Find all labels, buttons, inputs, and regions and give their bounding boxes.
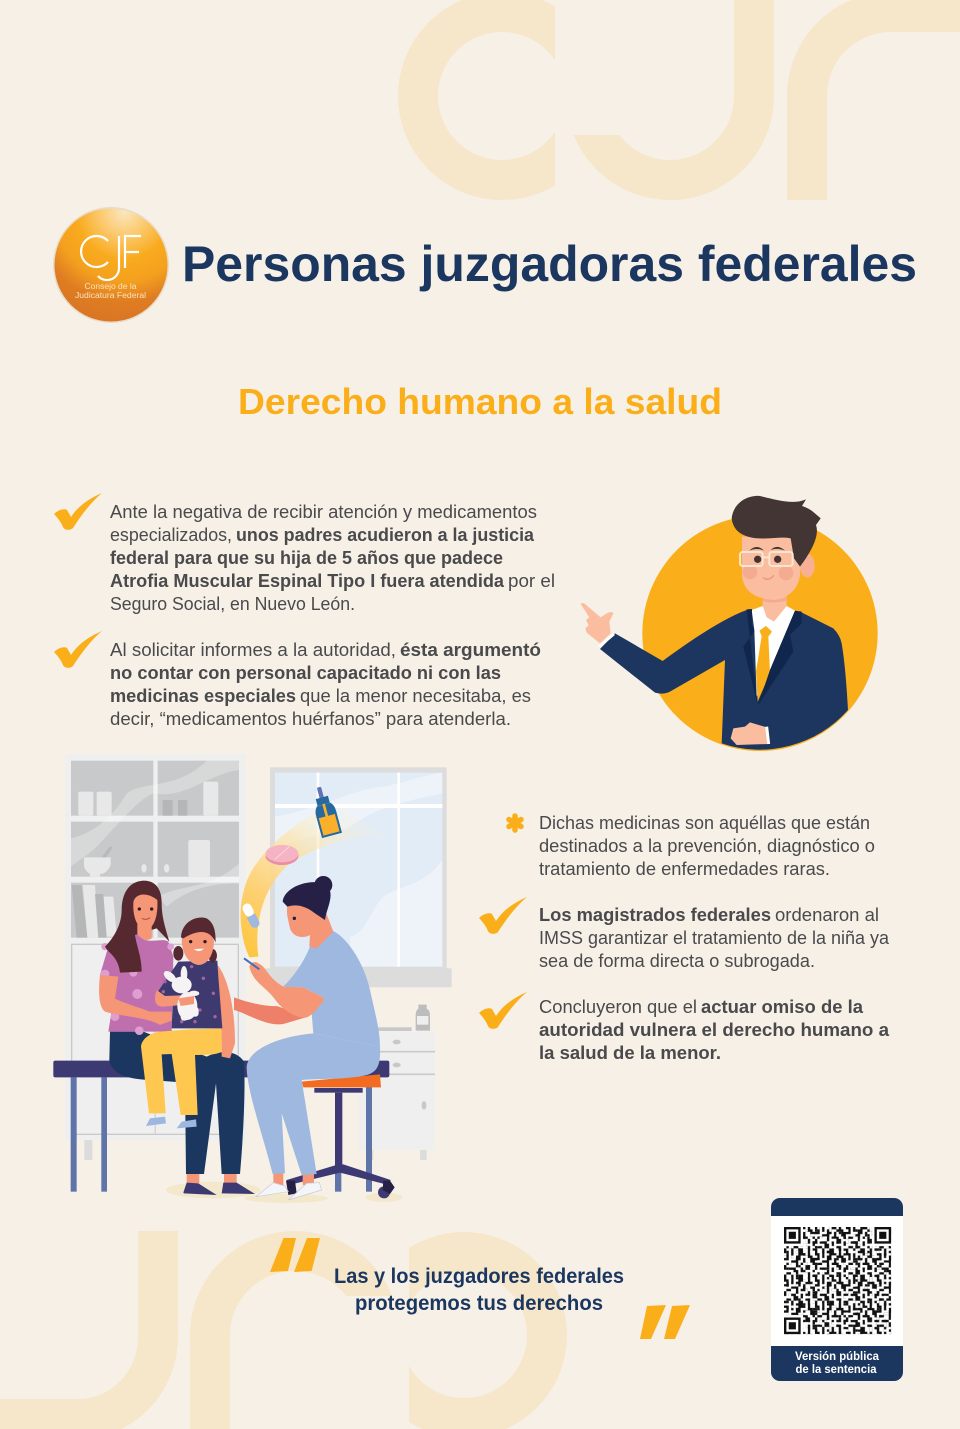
stool bbox=[286, 1074, 395, 1198]
text block: authority response: que la menor necesitaba, es bbox=[300, 685, 531, 706]
subtitle: Derecho humano a la salud bbox=[238, 381, 722, 422]
eyes and brows bbox=[749, 547, 785, 563]
text block: authority response: ésta argumentó bbox=[400, 639, 541, 660]
girl bbox=[141, 917, 235, 1128]
logo: Consejo de la Judicatura Federal: Consejo de la bbox=[84, 282, 137, 291]
QR card: de la sentencia bbox=[796, 1364, 877, 1376]
text block: definition of orphan drugs: destinados a la prevención, diagnóstico o bbox=[539, 835, 875, 856]
text block: conclusion bbox=[539, 996, 890, 1063]
watermark: top CJF letters bbox=[418, 0, 960, 200]
text block: authority response: decir, “medicamentos huérfanos” para atenderla. bbox=[110, 708, 511, 729]
text block: definition of orphan drugs bbox=[539, 812, 875, 879]
nurse bbox=[234, 876, 380, 1200]
slogan bbox=[334, 1265, 624, 1315]
tie bbox=[756, 626, 772, 702]
text block: definition of orphan drugs: Dichas medicinas son aquéllas que están bbox=[539, 812, 870, 833]
text block: magistrates ordered: sea de forma directa o subrogada. bbox=[539, 950, 815, 971]
face bbox=[742, 537, 802, 599]
smile bbox=[763, 575, 774, 579]
icon: check 4 bbox=[479, 992, 527, 1029]
title: Personas juzgadoras federales bbox=[182, 236, 917, 292]
text block: negative to provide care: Atrofia Muscular Espinal Tipo I fuera atendida bbox=[110, 570, 505, 591]
text block: authority response: Al solicitar informes a la autoridad, bbox=[110, 639, 396, 660]
yellow light beam bbox=[241, 807, 383, 957]
jacket bbox=[600, 610, 848, 750]
icon: check 1 bbox=[54, 493, 102, 530]
logo: Consejo de la Judicatura Federal: Judicatura Federal bbox=[75, 291, 146, 300]
text block: conclusion: autoridad vulnera el derecho humano a bbox=[539, 1019, 890, 1040]
text block: negative to provide care bbox=[110, 501, 555, 614]
illustration: man pointing in suit bbox=[581, 496, 878, 751]
floor shadows bbox=[166, 1182, 402, 1203]
illustration: nurse treating girl with mother bbox=[53, 754, 452, 1203]
text block: negative to provide care: especializados, bbox=[110, 524, 232, 545]
QR code bbox=[784, 1227, 891, 1334]
text block: negative to provide care: por el bbox=[508, 570, 555, 591]
yellow circle bbox=[642, 516, 878, 751]
mother bbox=[99, 881, 255, 1195]
QR card: Versión pública bbox=[795, 1351, 880, 1363]
window bbox=[265, 767, 452, 987]
lower hand bbox=[731, 722, 768, 745]
icon: check 2 bbox=[54, 631, 102, 668]
text block: negative to provide care: unos padres acudieron a la justicia bbox=[236, 524, 535, 545]
text block: conclusion: actuar omiso de la bbox=[701, 996, 864, 1017]
neck bbox=[763, 593, 787, 622]
text block: definition of orphan drugs: tratamiento de enfermedades raras. bbox=[539, 858, 830, 879]
text block: conclusion: la salud de la menor. bbox=[539, 1042, 721, 1063]
ear bbox=[800, 554, 815, 578]
shelf unit bbox=[65, 754, 246, 1160]
glasses bbox=[740, 552, 793, 566]
text block: negative to provide care: Seguro Social, en Nuevo León. bbox=[110, 593, 355, 614]
side cabinet bbox=[358, 1005, 435, 1160]
slogan: protegemos tus derechos bbox=[355, 1292, 603, 1315]
cheeks bbox=[743, 565, 757, 579]
icon: opening quote bbox=[270, 1238, 320, 1272]
icon: asterisk bbox=[509, 816, 521, 830]
text block: authority response bbox=[110, 639, 541, 729]
text block: authority response: medicinas especiales bbox=[110, 685, 296, 706]
shirt bbox=[752, 606, 795, 697]
exam table bbox=[53, 1061, 389, 1192]
QR card bbox=[771, 1198, 903, 1381]
capsule bbox=[241, 902, 261, 929]
text block: magistrates ordered: ordenaron al bbox=[775, 904, 879, 925]
text block: magistrates ordered: Los magistrados federales bbox=[539, 904, 771, 925]
hair bbox=[732, 496, 821, 567]
lapels bbox=[743, 609, 758, 705]
watermark: bottom letters bbox=[0, 1231, 547, 1429]
text block: magistrates ordered: IMSS garantizar el tratamiento de la niña ya bbox=[539, 927, 890, 948]
pointing hand bbox=[581, 603, 613, 643]
text block: magistrates ordered bbox=[539, 904, 890, 971]
icon: closing quote bbox=[640, 1305, 690, 1339]
logo: Consejo de la Judicatura Federal bbox=[53, 207, 169, 323]
text block: authority response: no contar con personal capacitado ni con las bbox=[110, 662, 501, 683]
pill bbox=[266, 845, 298, 865]
icon: check 3 bbox=[479, 897, 527, 934]
cuff bbox=[599, 634, 614, 647]
medicine bottle bbox=[309, 784, 342, 838]
text block: conclusion: Concluyeron que el bbox=[539, 996, 697, 1017]
text block: negative to provide care: Ante la negativa de recibir atención y medicamentos bbox=[110, 501, 537, 522]
text block: negative to provide care: federal para que su hija de 5 años que padece bbox=[110, 547, 503, 568]
slogan: Las y los juzgadores federales bbox=[334, 1265, 624, 1288]
